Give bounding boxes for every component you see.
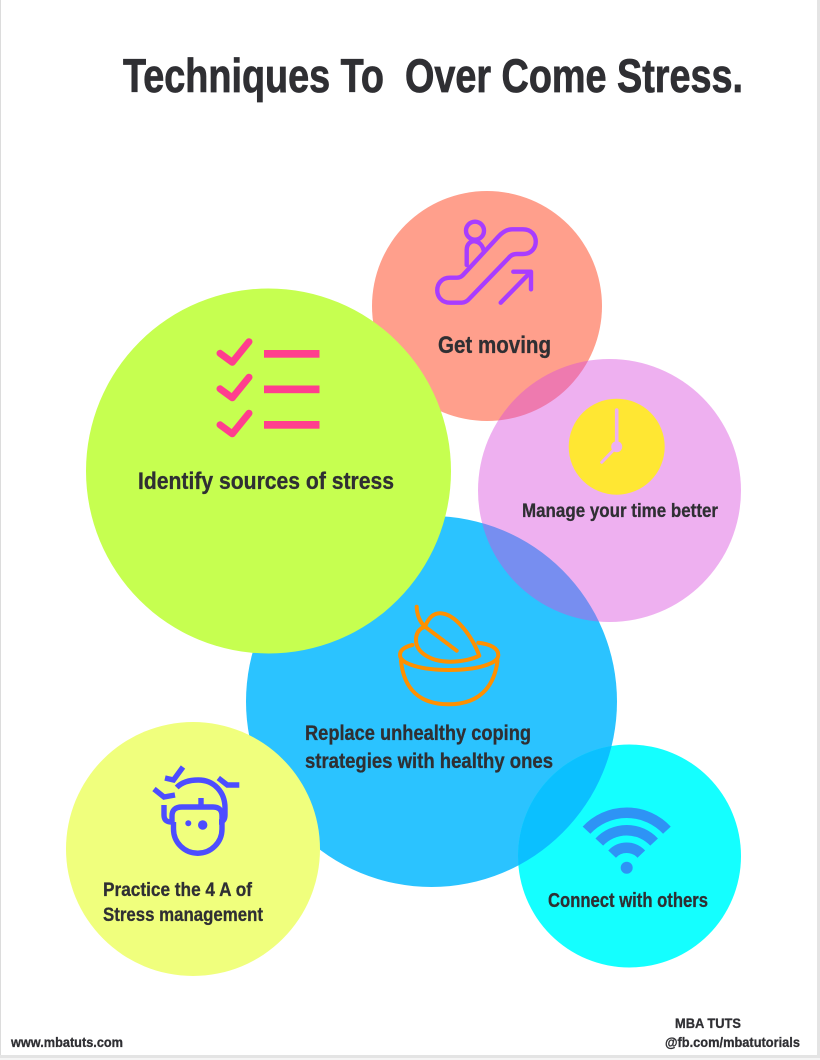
label: replace unhealthy: strategies with healthy ones — [305, 749, 553, 773]
label: practice 4 A — [103, 879, 263, 926]
icon: checklist — [220, 342, 320, 434]
icon: wifi — [586, 813, 667, 874]
icon: escalator — [437, 222, 536, 303]
footer: website: www.mbatuts.com — [10, 1034, 123, 1050]
label: replace unhealthy — [305, 721, 553, 773]
panel: connect with others — [518, 744, 741, 968]
footer: social credit: @fb.com/mbatutorials — [665, 1034, 800, 1050]
panel: get moving — [372, 191, 602, 421]
label: practice 4 A: Stress management — [103, 904, 263, 926]
panel: replace unhealthy coping strategies — [246, 516, 617, 887]
label: manage time: Manage your time better — [522, 500, 718, 522]
panel: practice the 4 A of stress management — [66, 722, 320, 976]
footer: social credit — [665, 1015, 800, 1050]
panel: manage your time better — [478, 359, 741, 622]
label: connect: Connect with others — [548, 890, 708, 912]
footer: social credit: MBA TUTS — [675, 1015, 741, 1031]
label: identify sources: Identify sources of stress — [138, 468, 394, 495]
label: replace unhealthy: Replace unhealthy coping — [305, 721, 531, 745]
icon: clock — [569, 399, 665, 495]
panel: identify sources of stress — [86, 288, 451, 654]
label: practice 4 A: Practice the 4 A of — [103, 879, 252, 901]
icon: stressed face — [154, 767, 239, 853]
icon: leaf in bowl — [400, 607, 498, 704]
label: get moving: Get moving — [438, 332, 551, 359]
